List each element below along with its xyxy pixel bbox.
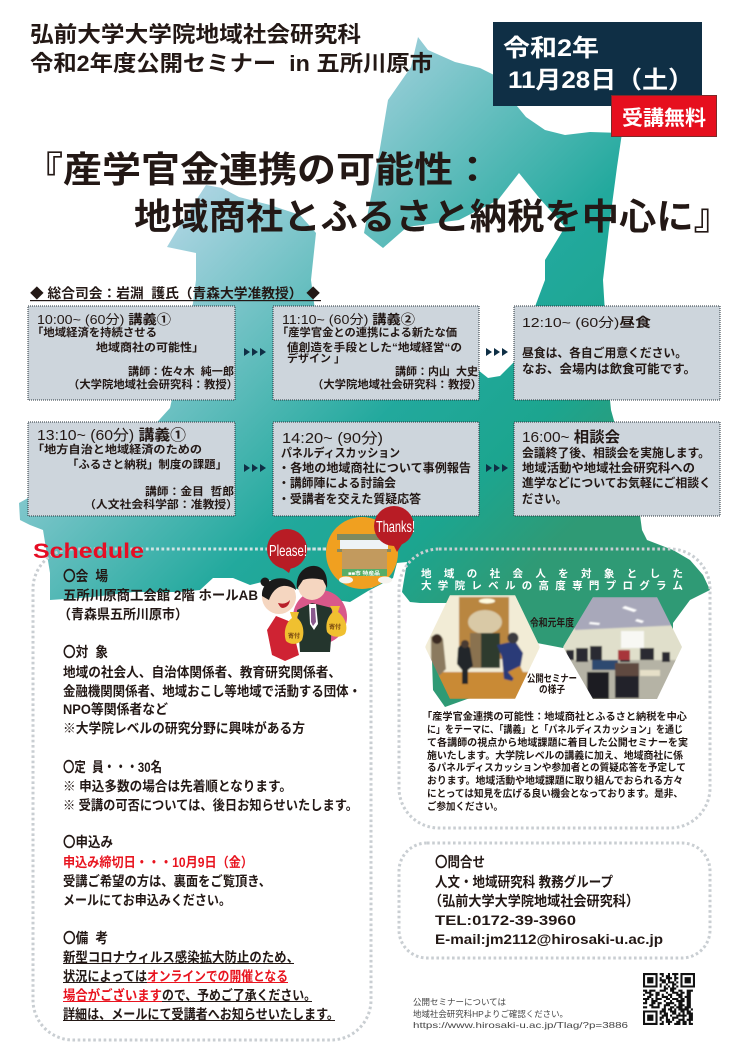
schedule card: lecture 1: 講師：佐々木 純一郎 [128, 364, 234, 378]
application [63, 834, 271, 908]
schedule card: lecture 1: 10:00~ (60分) 講義① [37, 312, 171, 327]
schedule card: lecture 1: （大学院地域社会研究科：教授） [68, 377, 238, 391]
moderator line: ◆ 総合司会：岩淵 護氏（青森大学准教授） ◆ [30, 285, 320, 301]
audience [63, 644, 361, 736]
dots connecting Schedule heading to bubbles [146, 548, 326, 550]
capacity: ※ 受講の可否については、後日お知らせいたします。 [63, 797, 358, 813]
audience: 〇対 象 [63, 644, 108, 660]
woman [260, 578, 299, 661]
schedule card: panel discussion: ・受講者を交えた質疑応答 [278, 491, 421, 506]
venue: （青森県五所川原市） [58, 606, 188, 622]
schedule card: panel discussion: ・講師陣による討論会 [278, 475, 396, 490]
speech bubble: Please: Please! [269, 543, 307, 560]
schedule card: lecture 3 [28, 422, 238, 516]
schedule details text [58, 568, 361, 1022]
free admission badge: 受講無料 [622, 107, 707, 130]
QR code [643, 973, 695, 1025]
website note: https://www.hirosaki-u.ac.jp/Tlag/?p=3886 [413, 1020, 628, 1030]
schedule card: panel discussion: パネルディスカッション [281, 445, 400, 460]
schedule card: lecture 2: 「産学官金との連携による新たな価 [277, 325, 457, 339]
photo: seminar venue entrance [425, 595, 540, 699]
schedule card: consultation: 会議終了後、相談会を実施します。 [522, 445, 710, 460]
main title: 『産学官金連携の可能性： [24, 149, 492, 190]
schedule card: lecture 1 [28, 306, 238, 400]
schedule card: panel discussion [273, 422, 479, 516]
schedule card: panel discussion: ・各地の地域商社について事例報告 [278, 460, 471, 475]
capacity: 〇定 員・・・30名 [63, 759, 162, 775]
speech bubble: Thanks: Thanks! [376, 519, 415, 536]
program heading: 地域の社会人を対象とした [421, 567, 683, 580]
program description text: おります。地域活動や地域課題に取り組んでおられる方々 [427, 774, 683, 787]
program description text: ご参加ください。 [427, 800, 503, 813]
photo captions: の様子 [539, 683, 565, 696]
donation bags: 寄付 [329, 623, 341, 631]
website note: 地域社会研究科HPよりご確認ください。 [413, 1009, 568, 1019]
donation bags [285, 606, 346, 644]
capacity: ※ 申込多数の場合は先着順となります。 [63, 778, 292, 794]
photo: seminar room audience [563, 597, 683, 701]
main title [24, 149, 731, 237]
notes: 〇備 考 [63, 930, 108, 946]
notes: 状況によっては [63, 968, 147, 984]
audience: ※大学院レベルの研究分野に興味がある方 [63, 720, 305, 736]
notes: 新型コロナウィルス感染拡大防止のため、 [63, 949, 299, 965]
schedule card: lunch: 昼食は、各自ご用意ください。 [522, 345, 687, 360]
background map of Aomori prefecture [19, 37, 710, 707]
schedule card: lunch: なお、会場内は飲食可能です。 [522, 361, 696, 376]
schedule card: lecture 2 [273, 306, 482, 400]
schedule card: lecture 3: 講師：金目 哲郎 [145, 484, 234, 498]
application: 〇申込み [63, 834, 113, 850]
application: 申込み締切日・・・10月9日（金） [63, 854, 253, 870]
audience: 地域の社会人、自治体関係者、教育研究関係者、 [63, 664, 341, 680]
icon: farmers market shop: ■■市 特産品 [348, 570, 380, 577]
schedule card: consultation: ださい。 [522, 492, 567, 506]
schedule card: lecture 2: （大学院地域社会研究科：教授） [312, 377, 482, 391]
schedule card: lecture 3: 「ふるさと納税」制度の課題」 [67, 457, 227, 471]
website note [413, 997, 628, 1030]
date box: 令和2年 [503, 35, 599, 62]
notes: 場合がございます [63, 987, 162, 1003]
venue: 〇会 場 [63, 568, 108, 584]
notes: 詳細は、メールにて受講者へお知らせいたします。 [63, 1006, 339, 1022]
schedule card: lecture 1: 地域商社の可能性」 [96, 340, 204, 354]
photo captions: 公開セミナー [527, 673, 577, 685]
header: organizer and seminar name: 弘前大学大学院地域社会研究科 [30, 22, 361, 47]
schedule heading: Schedule [33, 540, 144, 563]
venue [58, 568, 258, 622]
icon: farmers market shop [326, 517, 398, 589]
schedule card: consultation: 進学などについてお気軽にご相談く [522, 475, 711, 490]
date box: 11月28日（土） [508, 67, 694, 94]
panel: schedule details dotted frame [33, 549, 371, 1040]
donation bags: 寄付 [288, 632, 300, 640]
photo captions [527, 616, 577, 696]
illustration: couple holding donation bags [260, 566, 347, 661]
schedule card: lecture 1: 「地域経済を持続させる [32, 325, 157, 339]
flow arrows between cards [244, 348, 508, 472]
program description text: 「産学官金連携の可能性：地域商社とふるさと納税を中心 [422, 710, 687, 723]
contact text: 〇問合せ [435, 854, 485, 870]
program description text: るパネルディスカッションや参加者との質疑応答を予定して [427, 761, 686, 774]
schedule card: lunch: 12:10~ (60分) 昼食 [522, 315, 651, 330]
schedule card: lecture 3: 13:10~ (60分) 講義① [37, 426, 186, 444]
man [297, 566, 332, 652]
venue: 五所川原商工会館 2階 ホールAB [63, 587, 258, 603]
program description text: にとっては知見を広げる良い機会となっております。是非、 [427, 787, 683, 800]
schedule card: lecture 2: 11:10~ (60分) 講義② [282, 312, 415, 327]
contact text: （弘前大学大学院地域社会研究科） [429, 893, 639, 909]
notes [63, 930, 339, 1022]
audience: 金融機関関係者、地域おこし等地域で活動する団体・ [63, 683, 361, 699]
contact text: TEL:0172-39-3960 [435, 912, 576, 928]
panel: contact dotted frame [399, 843, 710, 958]
header: organizer and seminar name: 令和2年度公開セミナー in 五所川原市 [30, 51, 433, 76]
header: organizer and seminar name [30, 22, 433, 76]
schedule card: panel discussion: 14:20~ (90分) [282, 430, 383, 447]
schedule card: lecture 3: （人文社会科学部：准教授） [84, 497, 238, 511]
capacity [63, 759, 358, 813]
schedule card: lecture 3: 「地方自治と地域経済のための [32, 442, 202, 456]
audience: NPO等関係者など [63, 701, 168, 717]
speech bubble: Thanks [374, 506, 415, 552]
schedule card: lecture 2: 値創造を手段とした“地域経営“の [287, 340, 462, 354]
program description text: 施いたします。大学院レベルの講義に加え、地域商社に係 [427, 749, 683, 762]
panel: program description dotted frame [399, 549, 710, 828]
program heading: 大学院レベルの高度専門プログラム [421, 579, 683, 592]
schedule card: consultation [514, 422, 720, 516]
program heading [421, 567, 683, 592]
photo captions: 令和元年度 [530, 616, 574, 629]
speech bubble: Please [267, 529, 307, 573]
contact text [429, 854, 663, 947]
application: 受講ご希望の方は、裏面をご覧頂き、 [63, 873, 271, 889]
notes: オンラインでの開催となる [147, 969, 288, 984]
application: メールにてお申込みください。 [63, 892, 231, 908]
program description text [422, 710, 688, 813]
website note: 公開セミナーについては [413, 997, 506, 1007]
schedule card: lunch [514, 306, 720, 400]
schedule card: lecture 2: 講師：内山 大史 [395, 364, 478, 378]
notes: ので、予めご了承ください。 [162, 987, 316, 1003]
date box [493, 22, 702, 106]
contact text: 人文・地域研究科 教務グループ [435, 874, 613, 890]
program description text: に」をテーマに、「講義」と「パネルディスカッション」を通じ [427, 723, 683, 736]
program description text: て各講師の視点から地域課題に着目した公開セミナーを実 [427, 736, 688, 749]
free admission badge [612, 96, 716, 136]
contact text: E-mail:jm2112@hirosaki-u.ac.jp [435, 931, 663, 947]
main title: 地域商社とふるさと納税を中心に』 [134, 196, 731, 237]
schedule card: consultation: 地域活動や地域社会研究科への [522, 460, 695, 475]
schedule card: lecture 2: デザイン 」 [287, 351, 345, 365]
schedule card: consultation: 16:00~ 相談会 [522, 428, 620, 446]
